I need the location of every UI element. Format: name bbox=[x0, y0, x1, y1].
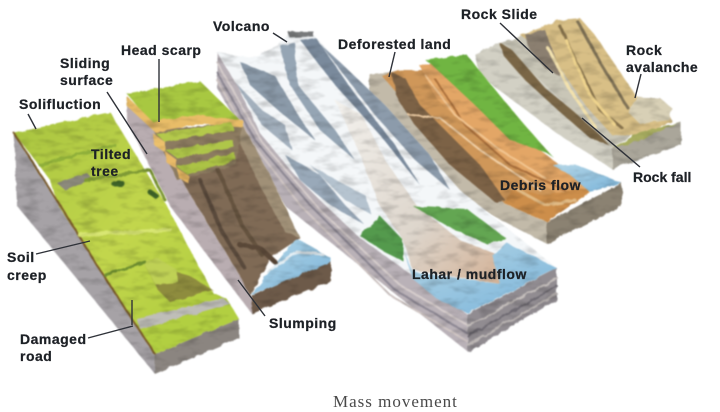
label: Damaged road: Damaged bbox=[20, 331, 87, 347]
label: Sliding surface: Sliding bbox=[60, 55, 110, 71]
label: Debris flow: Debris flow bbox=[500, 177, 581, 193]
label: Tilted tree: tree bbox=[91, 163, 119, 179]
block: rock slide and rock avalanche bbox=[475, 18, 681, 169]
label: Sliding surface: surface bbox=[60, 72, 113, 88]
label: Head scarp: Head scarp bbox=[121, 42, 201, 58]
block: slump bbox=[127, 81, 331, 314]
label: Damaged road: road bbox=[20, 348, 52, 364]
block: volcano and lahar bbox=[217, 32, 557, 352]
label: Rock fall: Rock fall bbox=[633, 169, 691, 185]
leader lines bbox=[28, 23, 641, 338]
label: Soil creep: creep bbox=[7, 267, 47, 283]
label: Deforested land: Deforested land bbox=[338, 36, 451, 52]
caption: Mass movement bbox=[333, 392, 458, 411]
label: Slumping: Slumping bbox=[269, 315, 337, 331]
block: deforested land and debris flow bbox=[369, 55, 622, 244]
label: Tilted tree: Tilted bbox=[91, 146, 131, 162]
label: Lahar / mudflow: Lahar / mudflow bbox=[412, 266, 527, 282]
label: Rock Slide: Rock Slide bbox=[461, 6, 538, 22]
label: Solifluction: Solifluction bbox=[19, 96, 101, 112]
label: Volcano: Volcano bbox=[213, 18, 270, 34]
label: Soil creep: Soil bbox=[7, 249, 35, 265]
label: Rock avalanche: Rock bbox=[626, 42, 662, 58]
block: soil creep and solifluction bbox=[14, 112, 239, 374]
label: Rock avalanche: avalanche bbox=[626, 59, 698, 75]
